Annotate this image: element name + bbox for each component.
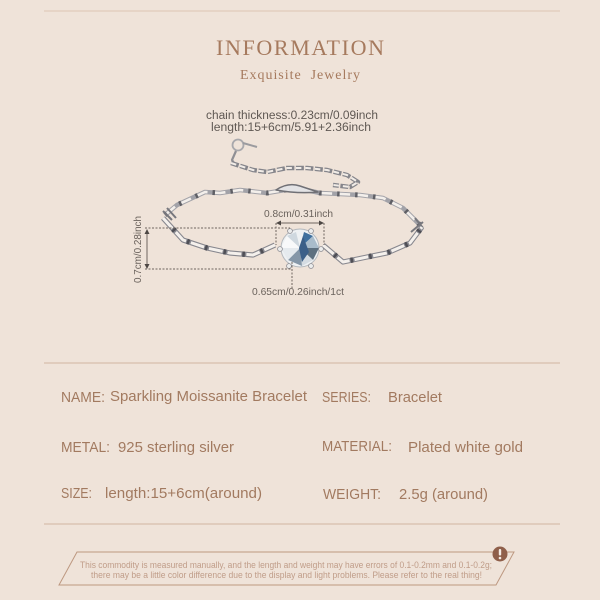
chain specification text: length:15+6cm/5.91+2.36inch [211,122,371,134]
end link clusters [163,208,423,232]
material row: MATERIAL: [322,438,392,455]
icon: exclamation mark [492,546,508,562]
material row: Plated white gold [408,439,523,456]
lower left chain [163,218,275,255]
series row: SERIES: [322,389,371,406]
disclaimer text: This commodity is measured manually, and the length and weight may have errors of 0.1-0.2mm and 0.1-0.2g; [80,560,492,571]
subtitle: Exquisite Jewelry [240,68,360,83]
chain specification text [206,110,378,134]
chain specification text: chain thickness:0.23cm/0.09inch [206,110,378,122]
disclaimer text: there may be a little color difference due to the display and light problems. Please refer to the real thing! [91,570,482,581]
name row: Sparkling Moissanite Bracelet [110,388,308,405]
product details [61,388,523,503]
series row: Bracelet [388,389,443,406]
dimension lines [144,220,324,288]
dimension label: stone width: 0.8cm/0.31inch [264,208,333,220]
lower right chain [323,227,422,262]
weight row: 2.5g (around) [399,486,488,503]
moissanite stone [278,229,323,268]
bracelet illustration [163,140,423,268]
weight row: WEIGHT: [323,486,381,503]
lobster clasp [276,185,318,193]
disclaimer text [80,560,492,581]
metal row [61,439,234,456]
title: INFORMATION [216,35,384,60]
disclaimer callout [59,546,514,585]
upper chain [165,188,420,225]
size row: length:15+6cm(around) [105,485,262,502]
extension chain [231,140,358,187]
material row [322,438,523,456]
size row: SIZE: [61,485,92,502]
series row [322,389,443,406]
dimension label: stone diameter and carat: 0.65cm/0.26inch/1ct [252,286,344,298]
metal row: 925 sterling silver [118,439,234,456]
weight row [323,486,488,503]
metal row: METAL: [61,439,110,456]
dimension label: stone height: 0.7cm/0.28inch [132,216,144,283]
name row: NAME: [61,389,105,406]
